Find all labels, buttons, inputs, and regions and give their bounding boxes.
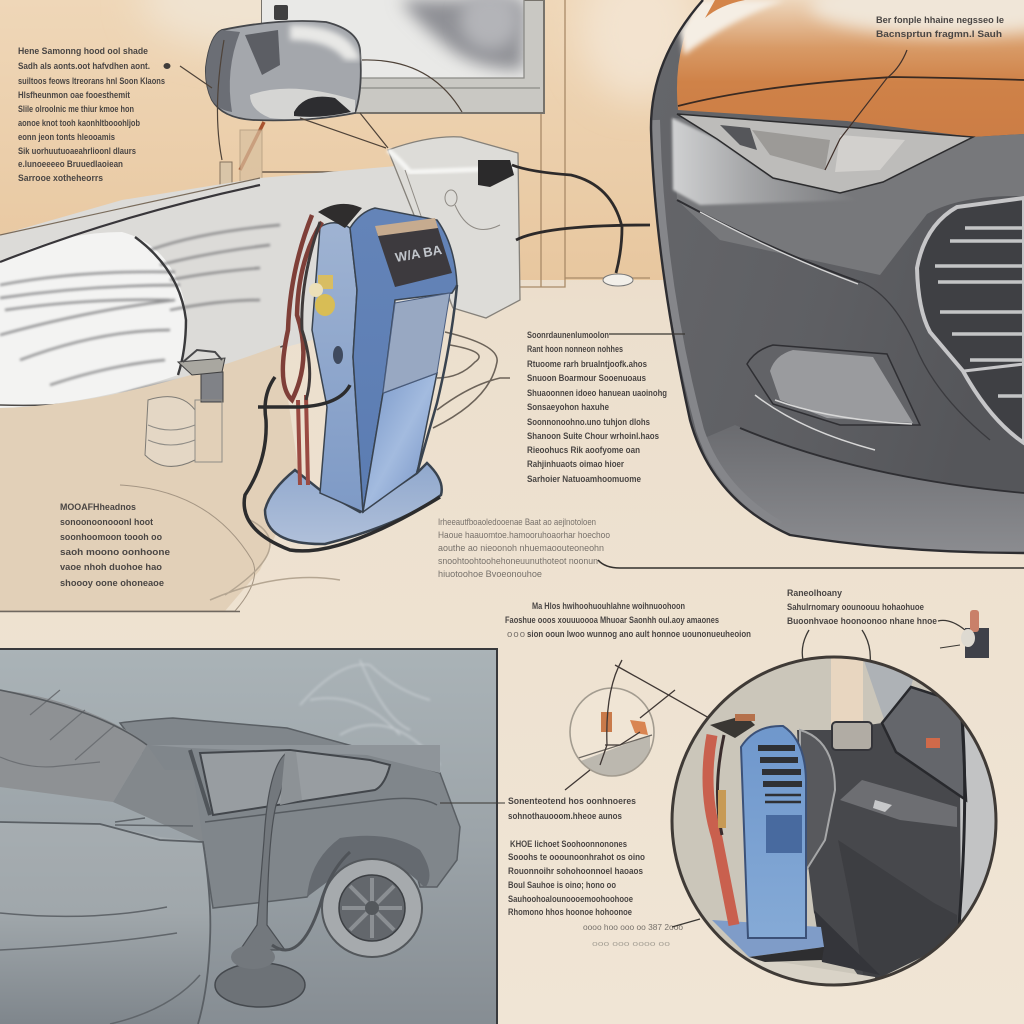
red cables <box>283 215 322 400</box>
bottom left panel <box>0 649 497 1024</box>
centre text block: Soonnonoohno.uno tuhjon dlohs <box>527 417 650 428</box>
wall strip <box>831 655 863 725</box>
lower centre light text block: hiuotoohoe Bvoeonouhoe <box>438 569 542 580</box>
small sketched components <box>145 350 225 466</box>
bottom paragraph text: ooo ooo oooo oo <box>592 941 670 948</box>
middle heading text block: Faoshue ooos xouuuoooa Mhuoar Saonhh oul.aoy amaones <box>505 615 719 626</box>
panel border <box>0 649 497 1024</box>
lower centre light text block: snoohtoohtoohehoneuunuthoteot noonun <box>438 556 598 567</box>
panel callout line <box>440 802 505 804</box>
right heading text block <box>787 588 937 664</box>
mesh panel <box>383 293 450 393</box>
top left text block: e.lunoeeeeo Bruuedlaoiean <box>18 159 123 170</box>
black cable <box>244 377 440 551</box>
wall <box>0 0 700 287</box>
orange hood <box>677 0 1024 137</box>
power cords <box>478 160 514 187</box>
knob <box>274 5 288 20</box>
middle heading text block: ooo <box>507 629 525 640</box>
right heading text block: Raneolhoany <box>787 588 843 599</box>
dash screen <box>832 722 872 750</box>
lower centre light text block <box>438 517 1024 580</box>
top left text block: suiltoos feows ltreorans hnl Soon Klaons <box>18 76 165 87</box>
window <box>262 0 544 113</box>
centre text block: Shanoon Suite Chour wrhoinl.haos <box>527 431 659 442</box>
small clamp icon <box>938 610 989 658</box>
car window <box>200 750 390 815</box>
lower centre light text block: aouthe ao nieoonoh nhuemaoouteoneohn <box>438 543 604 554</box>
floor <box>750 958 876 984</box>
bottom paragraph text: Rhomono hhos hoonoe hohoonoe <box>508 907 632 918</box>
yellow terminals <box>309 275 335 316</box>
charger shell back <box>800 730 835 880</box>
top right text block: Ber fonple hhaine negsseo Ie <box>876 15 1004 26</box>
red hose <box>708 735 734 925</box>
car interior <box>797 723 961 985</box>
lower left text block: shoooy oone ohoneaoe <box>60 578 164 589</box>
upper bumper panel <box>673 118 1024 275</box>
hose stand <box>215 752 350 1007</box>
top left text block: Sadh als aonts.oot hafvdhen aont. <box>18 61 150 72</box>
lower left text block: sonoonoonooonl hoot <box>60 517 154 528</box>
top left text block: Sik uorhuutuoaeahrlioonl dlaurs <box>18 146 136 157</box>
top left text block: eonn jeon tonts hleooamis <box>18 132 115 143</box>
display screen <box>377 225 452 287</box>
top left text block: Hene Samonng hood ool shade <box>18 46 148 57</box>
bottom callout text <box>508 796 636 822</box>
charger <box>244 204 457 551</box>
charger lower right panel <box>363 373 437 512</box>
top left text block: Slile olroolnic me thiur kmoe hon <box>18 104 134 115</box>
charger: W/A BA <box>394 242 444 265</box>
car roof <box>0 690 203 842</box>
bottom callout text: Sonenteotend hos oonhnoeres <box>508 796 636 807</box>
bottom callout text: sohnothauooom.hheoe aunos <box>508 811 622 822</box>
lower left text block: MOOAFHheadnos <box>60 502 136 513</box>
lower left text block <box>60 502 170 589</box>
charger vents <box>758 748 802 784</box>
door window <box>882 687 966 800</box>
wires from device <box>180 40 462 172</box>
clips <box>601 712 612 732</box>
lower bumper <box>700 425 1024 553</box>
charger body <box>741 726 806 938</box>
wall-mounted device <box>164 5 462 186</box>
centre text block <box>527 330 685 485</box>
fog lamp <box>747 345 920 450</box>
lower centre light text block: Irheeautfboaoledooenae Baat ao aejlnotoloen <box>438 517 596 528</box>
wheel arch <box>307 836 429 897</box>
floor cable loops <box>433 332 510 428</box>
large magnifier circle <box>670 656 998 986</box>
rear box unit <box>388 137 650 318</box>
right heading text block: Sahulrnomary oounoouu hohaohuoe <box>787 602 924 613</box>
floor area under car <box>0 345 340 612</box>
headlight <box>677 114 973 193</box>
white car silhouette sketch <box>0 165 470 408</box>
lower left text block: saoh moono oonhoone <box>60 547 170 558</box>
smoke wisps <box>300 660 440 765</box>
top right text block: Bacnsprtun fragmn.l Sauh <box>876 29 1002 40</box>
top left text block: Sarrooe xotheheorrs <box>18 173 103 184</box>
bottom paragraph text: Sauhoohoalounoooemoohoohooe <box>508 894 633 905</box>
centre text block: Soonrdaunenlumoolon <box>527 330 609 341</box>
charger base <box>265 463 442 544</box>
centre text block: Rieoohucs Rik aoofyome oan <box>527 445 640 456</box>
top left text block <box>18 46 165 184</box>
device shell <box>206 21 361 120</box>
top connector <box>710 718 755 738</box>
silver panel <box>672 118 858 205</box>
centre text block: Rtuoome rarh brualntjoofk.ahos <box>527 359 647 370</box>
car outline <box>651 0 1024 553</box>
middle heading text block: sion ooun Iwoo wunnog ano ault honnoe uounonueuheoion <box>527 629 751 640</box>
charger base <box>712 920 824 957</box>
grille <box>917 198 1024 443</box>
lower centre light text block: Haoue haauomtoe.hamooruhoaorhar hoechoo <box>438 530 610 541</box>
handle <box>873 800 892 812</box>
small magnifier circle <box>564 660 708 790</box>
top left text block: Hlsfheunmon oae fooesthemit <box>18 90 131 101</box>
car streaks <box>0 225 280 395</box>
crease line <box>677 200 860 282</box>
dark car body <box>120 718 460 908</box>
bottom paragraph text: Sooohs te ooounoonhrahot os oino <box>508 852 645 863</box>
centre text block: Snuoon Boarmour Sooenuoaus <box>527 373 646 384</box>
centre text block: Sonsaeyohon haxuhe <box>527 402 609 413</box>
bottom paragraph text <box>508 839 700 948</box>
wheel <box>322 859 422 957</box>
car door foreground <box>0 818 210 1024</box>
door panel <box>840 780 957 827</box>
middle heading text block <box>505 601 751 640</box>
middle heading text block: Ma Hlos hwihoohuouhlahne woihnuoohoon <box>532 601 685 612</box>
centre text block: Sarhoier Natuoamhoomuome <box>527 474 641 485</box>
right pillar <box>960 727 994 920</box>
bottom paragraph text: KHOE lichoet Soohoonnonones <box>510 839 627 850</box>
centre text block: Rant hoon nonneon nohhes <box>527 344 623 355</box>
charger side panel <box>312 223 363 512</box>
bottom paragraph text: Boul Sauhoe is oino; hono oo <box>508 880 616 891</box>
car front <box>640 0 1024 560</box>
centre text block: Rahjinhuaots oimao hioer <box>527 459 624 470</box>
right heading text block: Buoonhvaoe hoonoonoo nhane hnoe <box>787 616 937 627</box>
top left text block: aonoe knot tooh kaonhltbooohljob <box>18 118 140 129</box>
bottom paragraph text: Rouonnoihr sohohoonnoel haoaos <box>508 866 643 877</box>
lower left text block: soonhoomoon toooh oo <box>60 532 162 543</box>
bottom paragraph text: oooo hoo ooo oo 387 2ooo <box>583 923 684 932</box>
lower left text block: vaoe nhoh duohoe hao <box>60 562 162 573</box>
wires <box>565 660 730 790</box>
top handle <box>318 204 362 228</box>
charger front panel <box>350 208 457 512</box>
centre text block: Shuaoonnen idoeo hanuean uaoinohg <box>527 388 667 399</box>
top right text block <box>825 15 1004 170</box>
